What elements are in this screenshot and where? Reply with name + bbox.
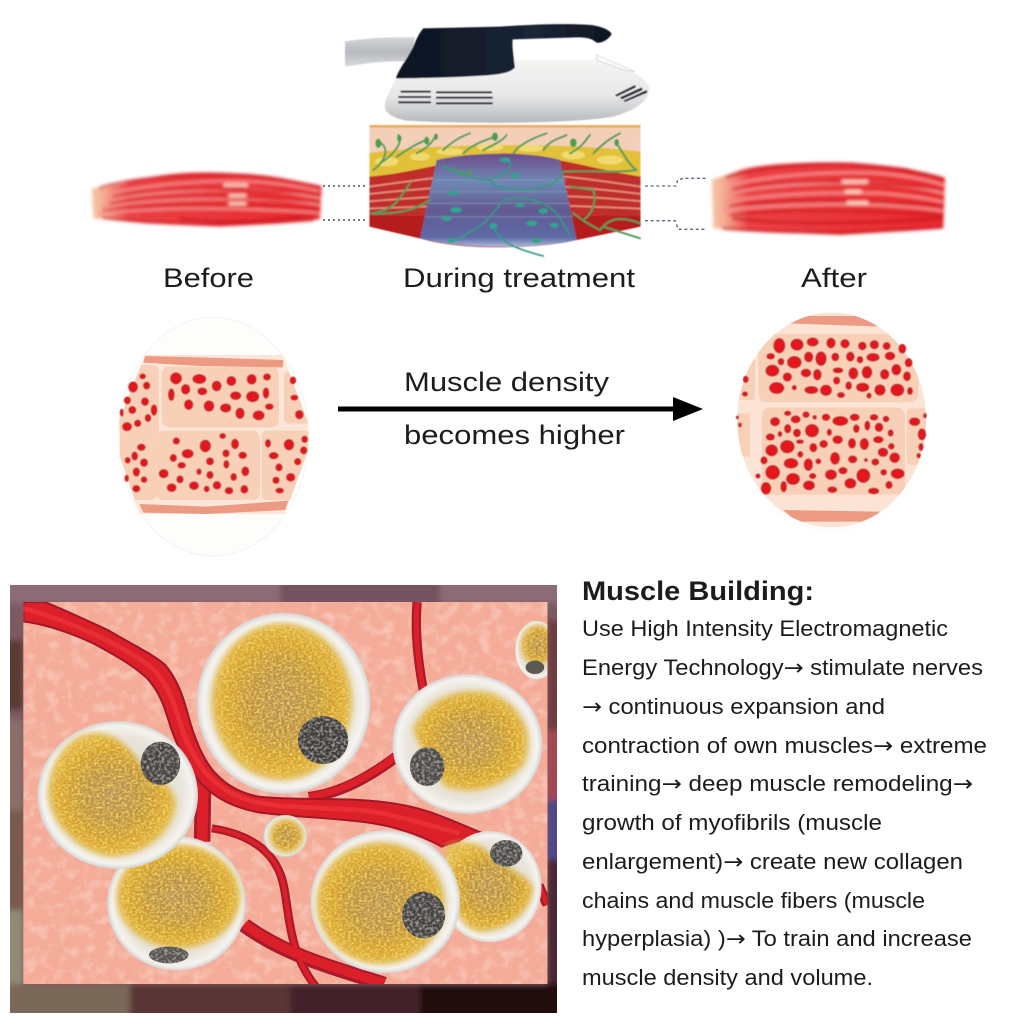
text block: muscle building description: chains and muscle fibers (muscle <box>582 888 925 913</box>
dotted connector lines, right <box>645 178 707 229</box>
text block: muscle building description: → continuous expansion and <box>582 694 885 720</box>
text block: muscle building description: contraction of own muscles → extreme <box>582 733 987 759</box>
label: muscle density becomes higher <box>404 367 625 450</box>
dotted connector lines, left <box>323 186 366 220</box>
nerve vines <box>372 133 640 238</box>
panel: fat cell illustration <box>0 575 570 1024</box>
blurred picture frame <box>0 575 570 1024</box>
text block: muscle building description: training → deep muscle remodeling → <box>582 771 973 797</box>
label: during treatment: During treatment <box>403 263 636 293</box>
fat cell: lower left <box>108 837 246 970</box>
label: before: Before <box>163 263 254 293</box>
label: after: After <box>801 263 867 293</box>
blood vessels <box>23 602 547 987</box>
fat cell: small centre <box>264 815 307 857</box>
label: muscle density becomes higher: becomes higher <box>404 420 625 450</box>
text block: muscle building description: Energy Technology → stimulate nerves <box>582 655 983 681</box>
icon: muscle after <box>712 162 945 235</box>
text block: muscle building description: muscle density and volume. <box>582 965 873 990</box>
fat cell: lower right front <box>311 831 460 973</box>
text block: muscle building description: hyperplasia) ) → To train and increase <box>582 926 972 952</box>
label: muscle density becomes higher: Muscle density <box>404 367 610 397</box>
fat cell: right <box>393 675 542 813</box>
text block: muscle building description: enlargement) → create new collagen <box>582 849 963 875</box>
text block: muscle building description <box>582 616 987 990</box>
pink tissue background <box>23 602 547 984</box>
fat cell: top right partial <box>515 620 548 680</box>
fat cell: top large <box>197 613 370 793</box>
arrow: density increase <box>338 397 703 421</box>
fat cell: lower right back <box>439 832 541 942</box>
icon: muscle before <box>92 172 322 227</box>
panel: before muscle cross-section <box>117 317 317 556</box>
icon: treatment handpiece device <box>345 24 649 123</box>
panel: during treatment tissue cross-section <box>369 125 641 258</box>
fat cell: left <box>38 722 197 868</box>
heading: muscle building: Muscle Building: <box>582 576 814 606</box>
text block: muscle building description: Use High Intensity Electromagnetic <box>582 616 948 641</box>
panel: after muscle cross-section <box>735 312 928 528</box>
text block: muscle building description: growth of myofibrils (muscle <box>582 810 882 835</box>
